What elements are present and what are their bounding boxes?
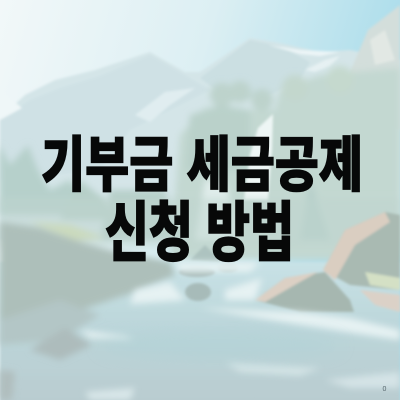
- small corner mark: 0: [383, 386, 387, 393]
- river: [0, 262, 400, 400]
- mid-stream rocks: [179, 245, 238, 301]
- water sheen: [100, 330, 340, 360]
- mountains: [0, 38, 400, 240]
- waterfall: [244, 114, 273, 200]
- title: [41, 132, 363, 269]
- title line 2: 신청 방법: [105, 196, 294, 269]
- left bank rocks: [0, 222, 175, 400]
- rapids: [80, 262, 400, 400]
- right cliff: [345, 5, 400, 130]
- central trees: [0, 180, 400, 248]
- forested hillside: [170, 66, 400, 260]
- right bank rocks: [255, 212, 400, 312]
- left trees: [0, 145, 120, 220]
